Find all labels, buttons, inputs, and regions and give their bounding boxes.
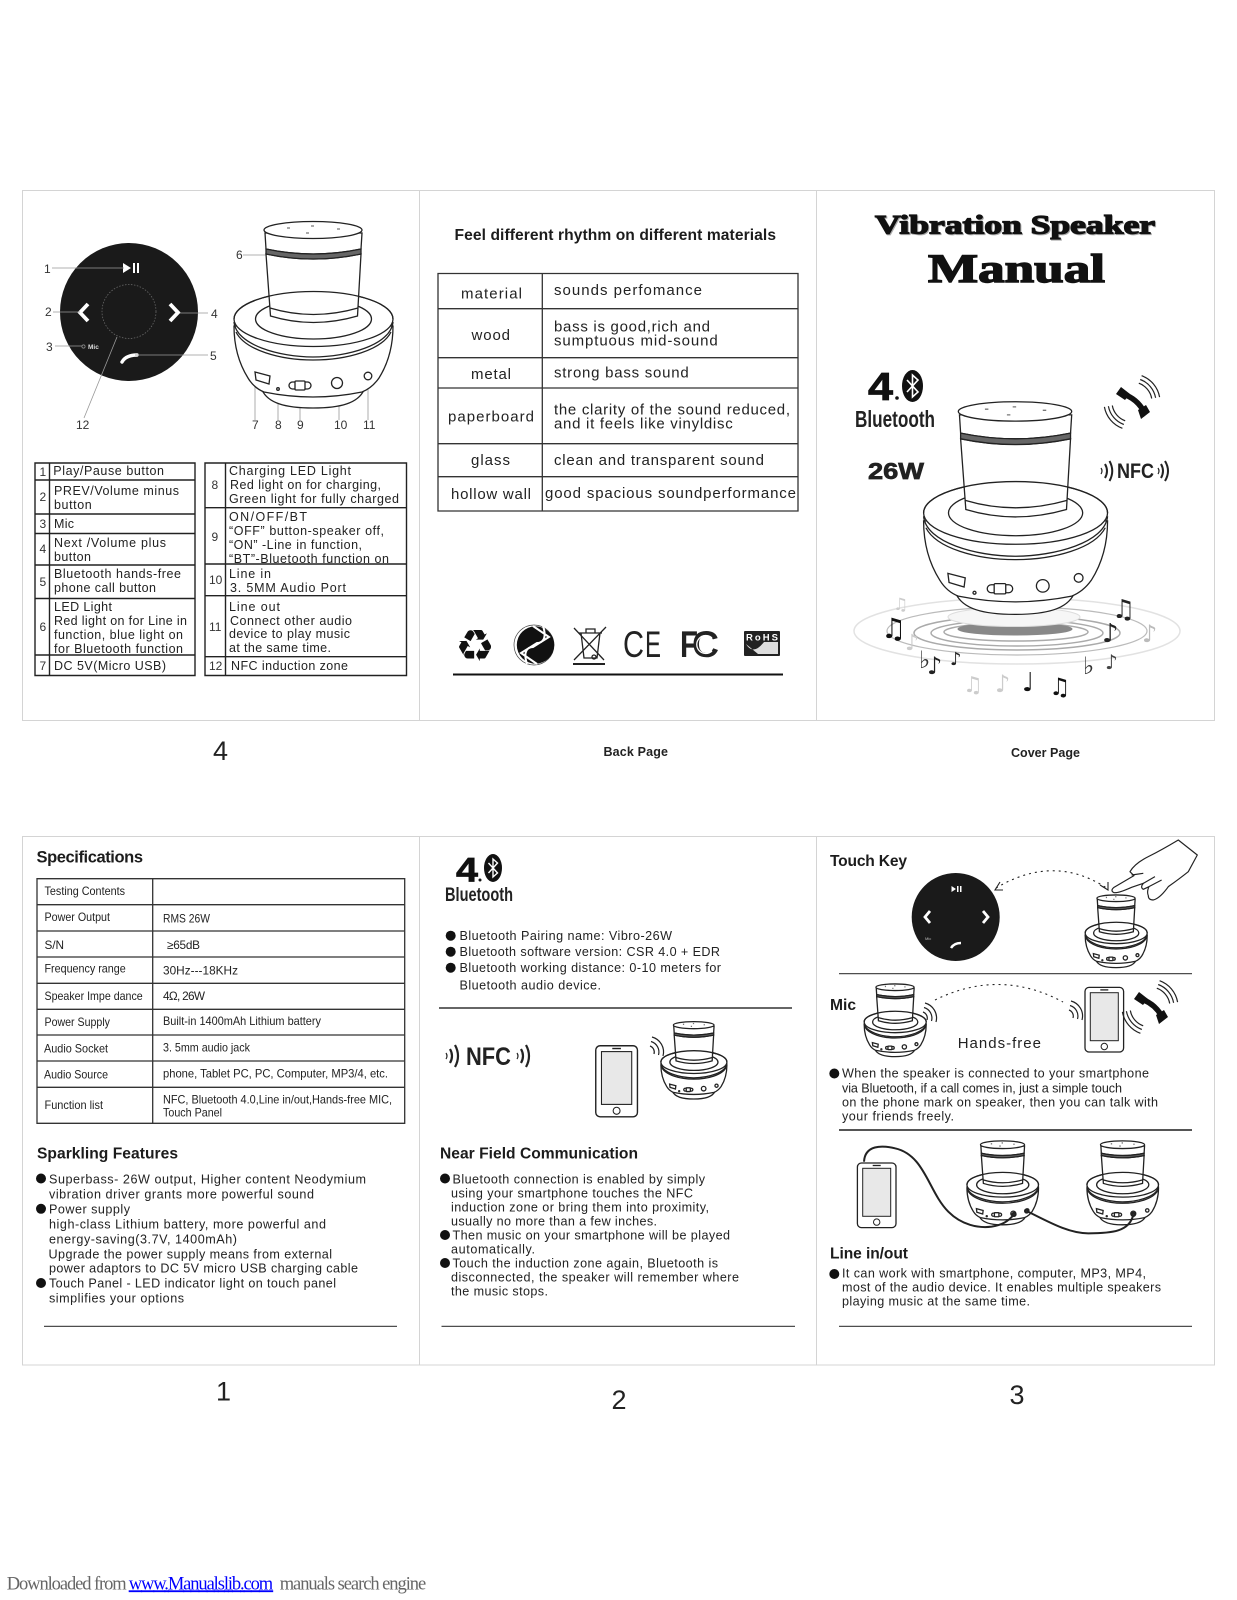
table: specifications: Touch Panel <box>163 1106 222 1120</box>
table: materials: wood <box>470 327 510 344</box>
phone line in <box>857 1163 896 1228</box>
music notes: ♫ <box>963 673 983 698</box>
illustration: phone near speaker <box>596 1022 727 1117</box>
logo: NFC large: NFC <box>466 1043 511 1071</box>
footer: download source: manuals search engine <box>280 1574 426 1594</box>
table: parts list left: Mic <box>54 517 74 531</box>
heading: sparkling features: Sparkling Features <box>37 1145 178 1162</box>
table: materials: good spacious soundperformance <box>545 485 796 502</box>
callout numbers <box>44 248 376 432</box>
leader lines <box>52 255 368 420</box>
table: materials: clean and transparent sound <box>554 452 764 469</box>
callout numbers: 12 <box>76 418 90 432</box>
panel: touch key, mic, line in/out <box>829 840 1197 1327</box>
arrow: dotted arc <box>996 871 1108 889</box>
table: parts list left: 3 <box>40 517 46 531</box>
panel: specifications <box>36 848 405 1327</box>
music notes: ♫ <box>1049 673 1071 701</box>
music notes: ♭ <box>1083 652 1094 680</box>
table: parts list right: “OFF” button-speaker off, <box>229 524 384 538</box>
table: materials <box>438 274 798 511</box>
table: materials: hollow wall <box>451 486 531 503</box>
divider under logos <box>453 674 783 676</box>
callout numbers: 10 <box>334 418 348 432</box>
logo: NFC: NFC <box>1117 459 1154 483</box>
text: features list: simplifies your options <box>49 1291 184 1305</box>
text: features list: Power supply <box>49 1202 131 1216</box>
footer: download source: www.Manualslib.com <box>129 1574 274 1594</box>
waves near phone <box>1069 1001 1083 1020</box>
title: manual: Manual <box>928 246 1105 291</box>
logo: bluetooth 4.0 small: 4 <box>456 852 478 890</box>
text: NFC list: disconnected, the speaker will remember where <box>451 1270 739 1284</box>
text: features list: high-class Lithium battery, more powerful and <box>49 1217 326 1231</box>
callout numbers: 3 <box>46 340 53 354</box>
callout numbers: 2 <box>45 305 52 319</box>
logo: FC <box>680 624 719 665</box>
panel: touch panel diagram <box>44 222 393 432</box>
panel: bluetooth and NFC <box>439 852 795 1327</box>
page number 4: 4 <box>213 736 228 766</box>
logo: bluetooth 4.0: 4 <box>868 366 893 409</box>
table: specifications: 3. 5mm audio jack <box>163 1041 250 1055</box>
panel: materials <box>438 227 798 676</box>
table: parts list left: LED Light <box>54 600 113 614</box>
heading: near field communication: Near Field Communication <box>440 1145 638 1162</box>
text: NFC list: using your smartphone touches the NFC <box>451 1186 693 1200</box>
callout numbers: 11 <box>363 418 376 432</box>
speaker line in <box>967 1141 1038 1225</box>
speaker touch <box>1085 895 1147 968</box>
music notes: ♭ <box>919 646 930 674</box>
music notes <box>881 595 1157 701</box>
footer: download source: Downloaded from <box>7 1574 127 1594</box>
table: specifications <box>37 879 405 1123</box>
table: parts list right: “BT”-Bluetooth function on <box>229 552 389 566</box>
table: parts list right: Red light on for charging, <box>230 478 381 492</box>
music notes: ♪ <box>905 631 919 656</box>
logo: FC: F <box>680 624 698 665</box>
caption: back page: Back Page <box>604 745 668 759</box>
table: parts list left <box>35 463 195 676</box>
table: materials: metal <box>471 366 511 383</box>
text: bluetooth list: Bluetooth audio device. <box>460 978 601 992</box>
touch panel small: Mic <box>925 936 931 941</box>
text: features list <box>36 1172 366 1305</box>
text: features list: vibration driver grants more powerful sound <box>49 1187 314 1201</box>
table: specifications: Testing Contents <box>44 884 125 898</box>
table: parts list left: phone call button <box>54 581 156 595</box>
logo: NFC <box>1101 459 1168 483</box>
logo: RoHS <box>744 631 780 656</box>
table: parts list right: ON/OFF/BT <box>229 510 307 524</box>
callout numbers: 6 <box>236 248 243 262</box>
arrowheads <box>995 882 1108 890</box>
table: parts list right: Connect other audio <box>230 614 352 628</box>
table: parts list left: 5 <box>40 575 46 589</box>
table: specifications: Power Output <box>44 910 111 924</box>
icon: green dot <box>514 625 554 665</box>
table: materials: paperboard <box>448 409 534 426</box>
text: mic description: your friends freely. <box>842 1109 954 1123</box>
table: parts list right: device to play music <box>229 627 350 641</box>
logo: CE: C <box>623 624 644 665</box>
heading: touch key: Touch Key <box>830 853 907 870</box>
label: hands-free: Hands-free <box>958 1035 1041 1052</box>
table: parts list right: 10 <box>209 573 223 587</box>
caption: cover page: Cover Page <box>1011 746 1080 760</box>
touch panel circle <box>60 243 198 381</box>
logo: FC: C <box>692 624 719 665</box>
phone mic <box>1085 987 1124 1052</box>
touch panel small <box>912 873 1000 961</box>
table: parts list right: 8 <box>212 478 218 492</box>
text: line in/out description: playing music at the same time. <box>842 1295 1030 1309</box>
text: NFC list: Bluetooth connection is enabled by simply <box>452 1172 706 1186</box>
table: specifications: Built-in 1400mAh Lithium battery <box>163 1014 321 1028</box>
table: specifications: 4Ω, 26W <box>163 989 206 1003</box>
title: vibration speaker: Vibration Speaker <box>875 210 1155 240</box>
music notes: ♪ <box>1105 650 1118 674</box>
table: specifications: RMS 26W <box>163 911 211 925</box>
page frames <box>22 190 1214 1365</box>
table: parts list left: Red light on for Line in <box>54 614 187 628</box>
panel: cover <box>854 210 1180 701</box>
music notes: ♫ <box>881 612 906 645</box>
table: parts list left: for Bluetooth function <box>54 642 183 656</box>
speaker mic <box>864 984 926 1057</box>
table: materials: the clarity of the sound reduced, <box>554 401 790 418</box>
arrow: hands-free dotted arc <box>935 984 1063 1002</box>
logo: bluetooth 4.0 small <box>445 852 513 906</box>
table: parts list right: NFC induction zone <box>231 659 348 673</box>
table: parts list right: 9 <box>212 530 218 544</box>
page number 3: 3 <box>1010 1380 1025 1410</box>
text: line in/out description: most of the audio device. It enables multiple speakers <box>842 1281 1161 1295</box>
logo: NFC large <box>446 1043 529 1071</box>
table: parts list left: 6 <box>40 620 46 634</box>
heading: specifications: Specifications <box>36 848 143 866</box>
table: specifications: Audio Socket <box>44 1042 109 1056</box>
text: NFC list: automatically. <box>451 1242 535 1256</box>
text: mic description: via Bluetooth, if a call comes in, just a simple touch <box>842 1081 1122 1095</box>
heading: mic: Mic <box>830 997 856 1014</box>
table: materials: material <box>461 285 522 302</box>
touch panel circle: Mic <box>88 344 99 351</box>
text: NFC list: induction zone or bring them into proximity, <box>451 1200 709 1214</box>
heading: line in/out: Line in/out <box>830 1245 908 1262</box>
label: 26W: 26W <box>868 458 924 484</box>
table: parts list left: Next /Volume plus <box>54 536 166 550</box>
callout numbers: 4 <box>211 307 218 321</box>
table: parts list left: 1 <box>40 465 46 479</box>
table: parts list right: 12 <box>209 659 223 673</box>
text: NFC list: Then music on your smartphone will be played <box>452 1228 730 1242</box>
text: features list: energy-saving(3.7V, 1400mAh) <box>49 1232 237 1246</box>
table: specifications: Audio Source <box>44 1068 108 1082</box>
text: NFC list: Touch the induction zone again, Bluetooth is <box>452 1256 718 1270</box>
text: NFC list: the music stops. <box>451 1284 548 1298</box>
music notes: ♫ <box>1112 595 1135 625</box>
table: specifications: Power Supply <box>44 1015 110 1029</box>
table: materials: bass is good,rich and <box>554 319 710 336</box>
table: parts list right: Line out <box>229 600 281 614</box>
table: parts list right: Line in <box>229 567 271 581</box>
table: specifications: phone, Tablet PC, PC, Computer, MP3/4, etc. <box>163 1067 388 1081</box>
text: line in/out description: It can work with smartphone, computer, MP3, MP4, <box>842 1267 1146 1281</box>
table: parts list left: function, blue light on <box>54 628 183 642</box>
table: specifications: Speaker Impe dance <box>44 989 143 1003</box>
table: materials: glass <box>471 452 510 469</box>
table: materials: sounds perfomance <box>554 282 702 299</box>
table: parts list right: “ON” -Line in function, <box>229 538 362 552</box>
table: parts list right: 11 <box>209 620 222 634</box>
table: materials: strong bass sound <box>554 365 689 382</box>
callout numbers: 5 <box>210 349 217 363</box>
table: materials: sumptuous mid-sound <box>554 333 718 350</box>
logo: CE: E <box>645 624 661 665</box>
text: bluetooth list: Bluetooth working distance: 0-10 meters for <box>460 961 721 975</box>
logo: RoHS: RoHS <box>746 632 778 644</box>
logo: bluetooth 4.0: Bluetooth <box>855 406 935 432</box>
text: bluetooth list <box>446 929 721 992</box>
table: parts list right: Charging LED Light <box>229 464 352 478</box>
speaker illustration <box>924 402 1108 614</box>
page number 2: 2 <box>612 1385 627 1415</box>
text: features list: Upgrade the power supply means from external <box>48 1247 332 1261</box>
callout numbers: 1 <box>44 262 51 276</box>
table: parts list left: button <box>54 550 91 564</box>
sound rings <box>854 598 1180 664</box>
table: parts list right: Green light for fully charged <box>229 492 399 506</box>
text: bluetooth list: Bluetooth Pairing name: Vibro-26W <box>460 929 672 943</box>
text: mic description: on the phone mark on speaker, then you can talk with <box>842 1095 1158 1109</box>
callout numbers: 9 <box>297 418 304 432</box>
text: mic description <box>829 1067 1158 1123</box>
music notes: ♪ <box>1102 619 1119 649</box>
logo: bluetooth 4.0 small: Bluetooth <box>445 884 513 906</box>
speaker diagram <box>234 222 393 408</box>
text: features list: Touch Panel - LED indicator light on touch panel <box>49 1276 336 1290</box>
text: bluetooth list: Bluetooth software version: CSR 4.0 + EDR <box>460 945 720 959</box>
speaker line out <box>1087 1141 1158 1225</box>
music notes: ♫ <box>893 595 908 615</box>
heading: materials: Feel different rhythm on different materials <box>454 227 776 244</box>
icon: WEEE bin <box>573 627 606 664</box>
text: NFC list: usually no more than a few inches. <box>451 1214 657 1228</box>
audio cables <box>864 1147 1135 1233</box>
table: specifications: ≥65dB <box>167 938 200 952</box>
logo: bluetooth 4.0 <box>855 366 935 432</box>
table: specifications: Frequency range <box>44 962 126 976</box>
table: parts list left: 7 <box>40 659 46 673</box>
icon: phone call <box>1104 376 1160 428</box>
table: specifications: 30Hz---18KHz <box>163 963 238 977</box>
text: NFC list <box>440 1172 739 1298</box>
text: features list: power adaptors to DC 5V micro USB charging cable <box>49 1261 358 1275</box>
text: mic description: When the speaker is connected to your smartphone <box>842 1067 1149 1081</box>
table: specifications: Function list <box>44 1098 104 1112</box>
table: parts list left: PREV/Volume minus <box>54 484 179 498</box>
icon: phone call small <box>1122 981 1178 1033</box>
table: parts list left: DC 5V(Micro USB) <box>54 659 166 673</box>
table: parts list left: 2 <box>40 490 46 504</box>
illustration: hand <box>1112 840 1197 900</box>
waves near speaker <box>923 1003 937 1022</box>
table: parts list left: Play/Pause button <box>53 464 164 478</box>
table: materials: and it feels like vinyldisc <box>554 415 733 432</box>
table: parts list left: button <box>54 498 92 512</box>
music notes: ♪ <box>950 649 962 670</box>
table: parts list left: Bluetooth hands-free <box>54 567 181 581</box>
table: parts list left: 4 <box>40 542 46 556</box>
callout numbers: 8 <box>275 418 282 432</box>
icon: recycle: ♻ <box>455 621 495 672</box>
table: parts list right: at the same time. <box>229 641 331 655</box>
footer: download source <box>7 1574 426 1594</box>
music notes: ♪ <box>995 670 1010 698</box>
music notes: ♪ <box>927 652 942 680</box>
music notes: ♩ <box>1022 668 1034 698</box>
table: parts list right <box>205 463 406 676</box>
music notes: ♪ <box>1142 620 1157 648</box>
table: specifications: S/N <box>44 938 64 952</box>
text: line in/out description <box>829 1267 1161 1309</box>
table: specifications: NFC, Bluetooth 4.0,Line in/out,Hands-free MIC, <box>163 1092 392 1106</box>
text: features list: Superbass- 26W output, Higher content Neodymium <box>49 1172 366 1186</box>
callout numbers: 7 <box>252 418 259 432</box>
page number 1: 1 <box>216 1377 231 1407</box>
table: parts list right: 3. 5MM Audio Port <box>230 581 347 595</box>
